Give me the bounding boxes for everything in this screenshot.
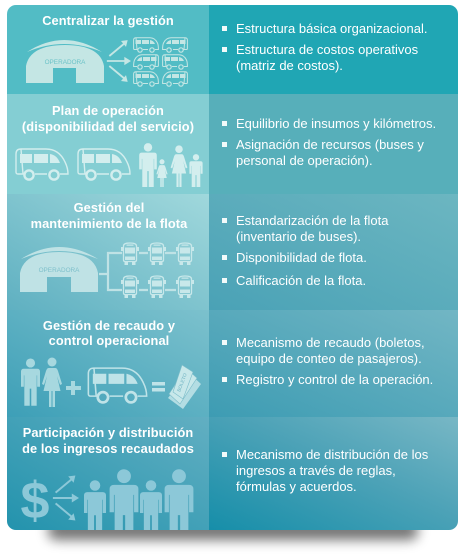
icon: tickets: BOLETO <box>176 372 189 393</box>
row 3 background <box>7 194 458 310</box>
panel: plan de operación <box>16 103 436 187</box>
icon: front-view buses <box>121 243 194 298</box>
icon: distribution arrows <box>107 40 131 82</box>
panel: gestión del mantenimiento <box>20 200 389 298</box>
list: ingresos a través de reglas, <box>236 463 396 478</box>
icon: fleet connectors <box>99 253 176 290</box>
icon: distribution arrows <box>53 476 79 520</box>
list: Estructura de costos operativos <box>236 42 419 57</box>
list <box>222 21 428 73</box>
list <box>222 116 436 168</box>
list: Estructura básica organizacional. <box>236 21 428 36</box>
panel shadow <box>48 520 418 540</box>
row 1 background <box>7 5 458 94</box>
icon: group of people <box>84 469 194 530</box>
list: Disponibilidad de flota. <box>236 250 367 265</box>
row 2 background <box>7 94 458 194</box>
heading: Gestión del <box>74 200 144 215</box>
list: Registro y control de la operación. <box>236 372 433 387</box>
list: Mecanismo de distribución de los <box>236 447 429 462</box>
icon: tickets <box>168 365 201 409</box>
icon: family <box>139 143 203 187</box>
list: Estandarización de la flota <box>236 213 389 228</box>
panel: plan de operación: (disponibilidad del servicio) <box>22 119 194 134</box>
panel: gestión del mantenimiento: mantenimiento de la flota <box>31 216 188 231</box>
heading: Gestión de recaudo y <box>43 318 176 333</box>
icon: operator depot: OPERADORA <box>39 267 80 274</box>
heading: Participación y distribución <box>23 425 193 440</box>
list: Mecanismo de recaudo (boletos, <box>236 335 425 350</box>
list <box>222 213 389 288</box>
list: Calificación de la flota. <box>236 273 366 288</box>
panel: participación y distribución: de los ingresos recaudados <box>22 441 194 456</box>
icon: dollar sign: $ <box>21 472 50 530</box>
list <box>222 335 433 387</box>
icon: bus <box>88 368 147 402</box>
list: Asignación de recursos (buses y <box>236 137 424 152</box>
row 5 background <box>7 417 458 530</box>
heading: Plan de operación <box>52 103 164 118</box>
list: (matriz de costos). <box>236 58 343 73</box>
list: fórmulas y acuerdos. <box>236 479 357 494</box>
icon: plus <box>66 381 81 395</box>
panel: gestión de recaudo <box>21 318 433 409</box>
icon: buses <box>16 149 130 180</box>
icon: bus fleet <box>134 38 187 86</box>
icon: operator depot: OPERADORA <box>45 59 86 66</box>
list: equipo de conteo de pasajeros). <box>236 351 422 366</box>
heading: Centralizar la gestión <box>42 13 174 28</box>
icon: passengers <box>21 358 62 407</box>
list <box>222 447 429 494</box>
icon: operator depot <box>20 247 98 292</box>
list: personal de operación). <box>236 153 373 168</box>
row 4 background <box>7 310 458 417</box>
icon: equals <box>152 382 165 392</box>
list: Equilibrio de insumos y kilómetros. <box>236 116 436 131</box>
panel: participación y distribución <box>21 428 428 530</box>
panel: gestión de recaudo: control operacional <box>49 333 169 348</box>
list: (inventario de buses). <box>236 229 361 244</box>
icon: operator depot <box>26 40 104 83</box>
panel: centralizar la gestión <box>26 13 428 86</box>
